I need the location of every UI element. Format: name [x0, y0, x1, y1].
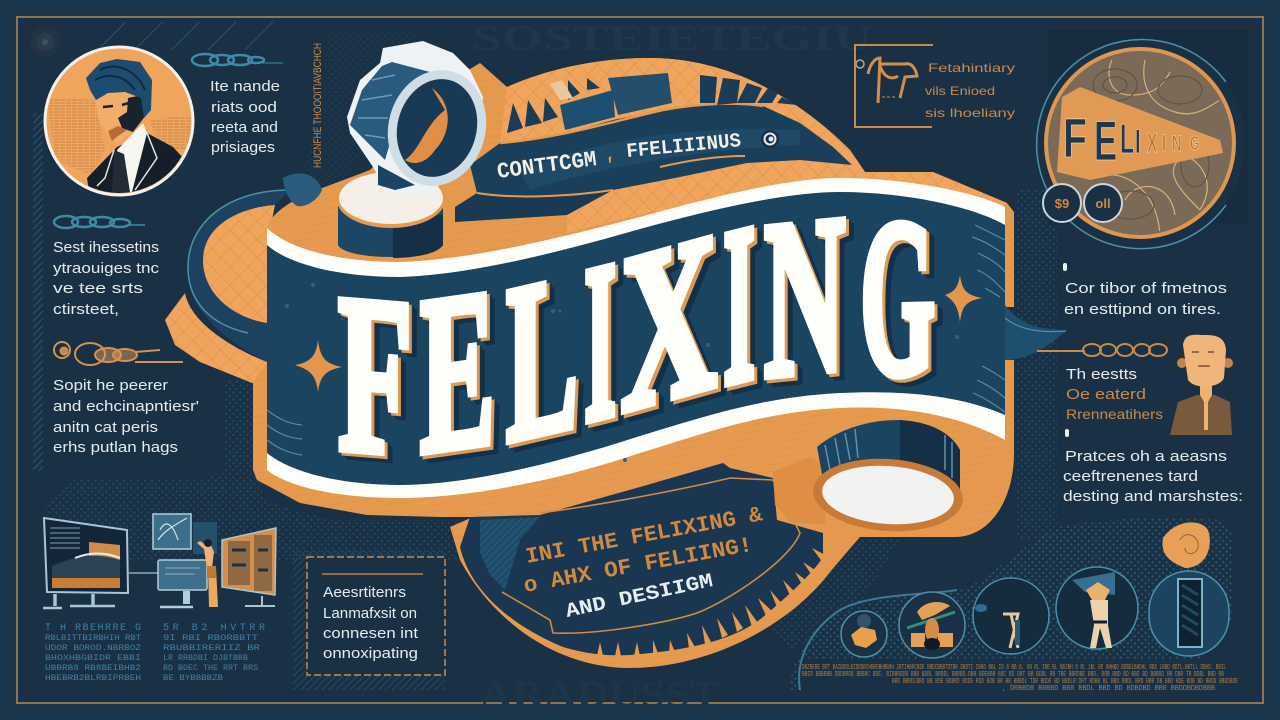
callout: dashed text box: connesen int [323, 626, 418, 642]
text: left block two: anitn cat peris [53, 420, 158, 436]
circle 4: figure with raised arms [1056, 567, 1138, 649]
orange side tab [773, 457, 830, 525]
monitor three [222, 528, 276, 606]
text: right block one: Cor tibor of fmetnos [1065, 281, 1227, 297]
text: teal caption right: BE BYBBBBZB [163, 673, 223, 683]
orange rim [811, 454, 965, 536]
text: right block two: Oe eaterd [1066, 386, 1146, 403]
text: portrait caption: Ite nande [210, 79, 280, 95]
floating chart panel [153, 514, 191, 549]
main title FELIXING: I [584, 212, 616, 470]
text: teal caption left: BHOXHBGBIDR EBBI [45, 653, 141, 663]
connecting cable [128, 572, 158, 574]
main title FELIXING: G [860, 173, 935, 423]
ribbon: bottom scroll banner [460, 463, 829, 656]
portrait tie [112, 150, 130, 192]
ghost heading: SOSTEIETEGIU [472, 18, 872, 58]
coin wedge [1057, 87, 1223, 180]
text: teal caption right: BD BDEC THE RRT BRS [163, 663, 258, 673]
text: teal caption left: HBEBRB2BLRBIPRBEH [45, 673, 141, 683]
text: portrait caption [210, 79, 280, 156]
timeline circles [841, 522, 1229, 658]
main title FELIXING: I [723, 175, 755, 433]
text: bottom orange microtext [802, 664, 1238, 693]
scroll heading text: , [601, 144, 618, 167]
panel: monitors illustration [43, 514, 276, 608]
lower lattice tail [165, 293, 267, 383]
tape roll right [773, 420, 965, 536]
text: teal caption right: LR RRBDBI DJBTBRB [163, 653, 248, 663]
text: upper right orange caption: vils Enioed [925, 84, 995, 98]
text: teal caption left: RBLBITTBIRBHIH RBT [45, 633, 141, 643]
monitor one [43, 518, 128, 608]
callout: dashed text box: Lanmafxsit on [323, 606, 417, 622]
text: left block two [53, 378, 199, 456]
text: teal caption right [163, 623, 265, 683]
text: upper right orange caption [925, 61, 1015, 120]
portrait newsprint texture [47, 98, 190, 175]
icon: corner knob [30, 27, 60, 57]
callout: dashed text box: Aeesrtitenrs [323, 585, 406, 601]
left hatch strip [33, 113, 43, 471]
coin word FELIXING: L [1120, 116, 1134, 163]
icon: square figure sign [855, 45, 933, 127]
text: right block two: Rrenneatihers [1066, 406, 1163, 422]
text: left block one: ve tee srts [53, 281, 143, 297]
main title FELIXING: L [506, 225, 578, 490]
text: left block one: ytraouiges tnc [53, 261, 159, 277]
wave panel bottom right [790, 518, 1233, 690]
scroll heading text: CONTTCGM [496, 147, 598, 185]
main title FELIXING: N [764, 167, 845, 425]
coin badge left: $9 [1055, 196, 1069, 211]
stacked books [560, 90, 615, 130]
coin word FELIXING: F [1063, 107, 1087, 170]
portrait mouth and eyes [108, 126, 127, 141]
bottom scroll text: INI THE FELIXING & [524, 502, 765, 570]
teal outer arc [1037, 40, 1226, 249]
text: right block one [1064, 281, 1227, 318]
icon: left star [295, 340, 342, 392]
text: right block one: en esttipnd on tires. [1064, 302, 1221, 318]
scroll heading text: FFELIIINUS [625, 130, 742, 164]
navy ring with teal line [187, 190, 290, 362]
dark roll body [817, 420, 960, 490]
tooth wedges [507, 75, 797, 133]
crumpled white ring [347, 41, 483, 197]
white roll face [820, 461, 956, 529]
text: left block two: Sopit he peerer [53, 378, 168, 394]
decorative panel behind coin [1048, 30, 1248, 225]
circle 1: orange bloom [841, 611, 887, 657]
ribbon: right fold [1005, 305, 1067, 360]
text: bottom orange microtext: , DRBBDB BRBBD BBR BBDL BBD BD BDBDBD BBR BBDDBDBDBBB [1002, 685, 1215, 693]
portrait suit [87, 133, 182, 193]
vertical microtext: HUCNFHE THOOOITIAVBCHCH [312, 43, 324, 168]
curved accent lines [267, 225, 1005, 455]
scroll heading text [496, 130, 742, 185]
text: teal caption left [45, 623, 141, 683]
tape roll top [337, 41, 493, 258]
figure at screen [197, 539, 218, 607]
coin badge right [1084, 184, 1122, 222]
ribbon: orange back band [253, 58, 1014, 668]
ribbon: white front band [267, 178, 1005, 498]
coin word FELIXING: G [1190, 133, 1199, 155]
portrait medallion [45, 47, 193, 198]
bottom scroll text: AND DESIIGM [564, 570, 715, 624]
text: right block three: ceeftrenenes tard [1063, 469, 1198, 485]
icon: bald figure [1170, 335, 1233, 435]
text: upper right orange caption: sis lhoeliany [925, 106, 1015, 120]
text: teal caption right: 9I RBI RBORBBTT [163, 633, 258, 643]
text: portrait caption: prisiages [211, 140, 275, 156]
circle 5: framed panel [1149, 571, 1229, 656]
main title FELIXING: X [621, 185, 717, 460]
orange piping [500, 104, 763, 143]
coin badge right: oll [1095, 196, 1111, 211]
text: right block two: Th eestts [1066, 367, 1137, 383]
portrait lapels [97, 133, 157, 190]
coin word FELIXING: N [1172, 132, 1182, 156]
circle 3: walking legs [973, 578, 1049, 654]
text: right block three: Pratces oh a aeasns [1065, 449, 1227, 465]
icon: teal chain left [54, 216, 145, 228]
coin contour lines [1092, 60, 1220, 231]
bullet [1063, 263, 1067, 271]
bottom scroll text: o AHX OF FELIING! [522, 533, 755, 599]
icon: teal chain top [192, 54, 283, 66]
portrait hair [86, 59, 152, 118]
coin badge left [1043, 184, 1081, 222]
icon: right star [945, 275, 982, 322]
decorative top hatch [75, 22, 300, 50]
text: left block one [53, 240, 159, 318]
text: left block two: and echcinapntiesr' [53, 399, 199, 415]
orange inner outline [502, 478, 800, 633]
speckles [285, 283, 959, 462]
portrait shirt [117, 123, 147, 192]
lattice curl [203, 205, 275, 323]
text: right block two [1066, 367, 1163, 422]
ribbon: top scroll navy banner [455, 73, 852, 222]
coin word FELIXING: I [1135, 123, 1141, 160]
icon: orange chain right [1037, 344, 1167, 356]
teal wave line [799, 590, 957, 690]
text: teal caption left: T H RBEHRRE G [45, 623, 141, 634]
text: teal caption right: 5R B2 HVTRR [163, 623, 265, 634]
hatch behind callout [293, 550, 445, 690]
text: right block three [1063, 449, 1243, 505]
text: left block two: erhs putlan hags [53, 440, 178, 456]
text: upper right orange caption: Fetahintiary [928, 61, 1015, 75]
ribbon: top lattice [500, 58, 1007, 233]
main title FELIXING [338, 167, 935, 504]
roll base [338, 205, 443, 257]
ghost footer text: ARADUSST [480, 674, 720, 714]
orange flame inside lens [405, 88, 448, 163]
monitor two [158, 560, 207, 607]
coin word FELIXING [1063, 107, 1199, 172]
main title FELIXING: F [338, 249, 412, 504]
teal hatched wedge [480, 517, 540, 590]
main title FELIXING: E [420, 241, 495, 501]
text: teal caption left: UBBRB8 RB8BEIBHB2 [45, 663, 141, 673]
callout: dashed text box: onnoxipating [323, 646, 418, 662]
text: portrait caption: riats ood [211, 100, 277, 116]
bullet [1065, 429, 1069, 437]
icon: teal shield [283, 173, 322, 206]
grid panel [193, 522, 217, 554]
coin word FELIXING: E [1094, 110, 1117, 172]
icon: orange chain left [54, 342, 183, 365]
ribbon: navy front panel [267, 192, 1005, 485]
text: left block one: Sest ihessetins [53, 240, 159, 256]
portrait face [96, 92, 136, 142]
text: right block three: desting and marshstes: [1063, 489, 1243, 505]
ribbon: left back scroll [165, 190, 290, 383]
coin medallion [1035, 38, 1245, 249]
halftone fields [45, 30, 1057, 650]
bottom scroll text [522, 502, 765, 624]
ring lens [381, 64, 493, 192]
coin word FELIXING: X [1147, 127, 1157, 158]
portrait face shadow [118, 95, 146, 132]
orange blob [1162, 522, 1210, 568]
circle 2: figure with boxes [899, 592, 965, 658]
icon: small medallion [761, 130, 779, 148]
orange spikes [597, 548, 829, 656]
text: teal caption left: UDOR BOROD.NBRBOZ [45, 643, 141, 653]
text: portrait caption: reeta and [211, 120, 278, 136]
text: teal caption right: RBUBBIRERIIZ BR [163, 643, 260, 653]
callout: dashed text box [307, 557, 445, 675]
coin word FELIXING: I [1162, 130, 1166, 157]
text: left block one: ctirsteet, [53, 302, 119, 318]
